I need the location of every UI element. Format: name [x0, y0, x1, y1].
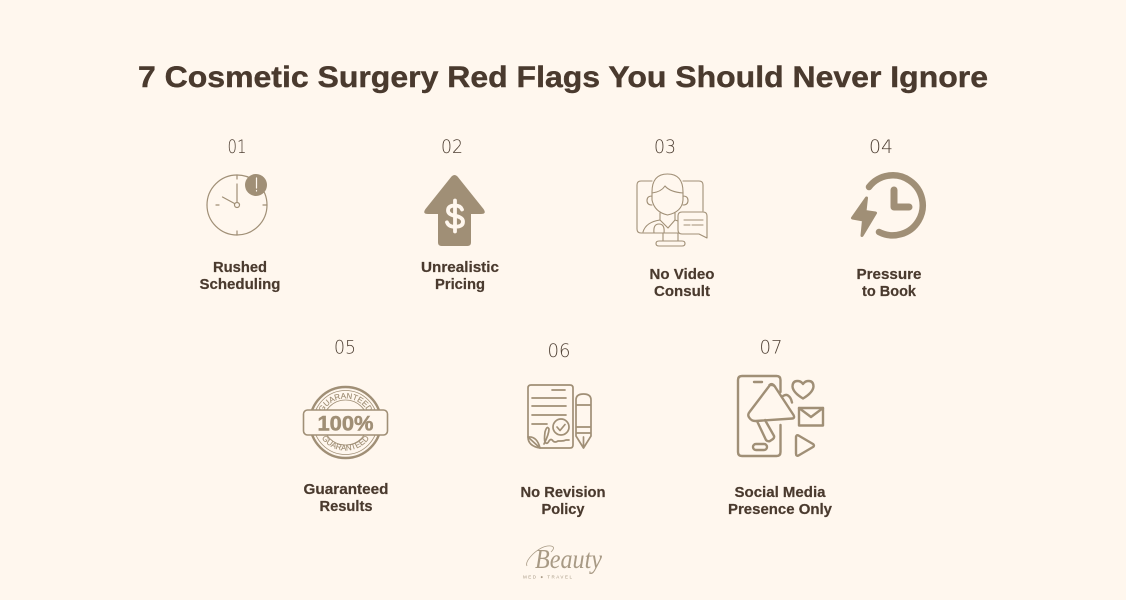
item 05: guaranteed results: 05	[334, 338, 356, 358]
icon: guaranteed stamp: GUARANTEED	[319, 392, 372, 410]
item 04: pressure to book	[852, 137, 923, 300]
item 05: guaranteed results: Results	[320, 499, 372, 515]
item 05: guaranteed results	[302, 338, 388, 515]
item 01: rushed scheduling: Rushed	[213, 260, 267, 276]
logo: Beauty Med Travel	[523, 544, 602, 580]
icon: guaranteed stamp	[302, 386, 388, 460]
logo: Beauty Med Travel: Beauty	[535, 544, 602, 574]
icon: signed document and pencil	[528, 385, 591, 448]
item 03: no video consult: 03	[654, 137, 676, 158]
icon: doctor on monitor	[637, 174, 707, 246]
item 04: pressure to book: Pressure	[856, 267, 922, 283]
icon: guaranteed stamp: GUARANTEED	[322, 436, 368, 451]
item 01: rushed scheduling: 01	[228, 137, 246, 158]
item 02: unrealistic pricing: Unrealistic	[421, 260, 499, 276]
icon: clock with lightning	[852, 175, 923, 236]
icon: phone with megaphone	[738, 376, 823, 456]
item 01: rushed scheduling	[200, 137, 280, 293]
icon: up arrow with dollar	[424, 175, 485, 246]
item 07: social media presence only: Presence Only	[728, 502, 832, 518]
title: 7 Cosmetic Surgery Red Flags You Should Never Ignore	[138, 61, 988, 94]
item 05: guaranteed results: Guaranteed	[304, 482, 388, 498]
item 03: no video consult: Consult	[654, 284, 710, 300]
item 06: no revision policy: 06	[548, 341, 570, 362]
item 06: no revision policy: Policy	[542, 502, 584, 518]
item 04: pressure to book: 04	[869, 137, 893, 158]
item 04: pressure to book: to Book	[862, 284, 917, 300]
item 02: unrealistic pricing: Pricing	[435, 277, 485, 293]
item 07: social media presence only	[728, 338, 832, 518]
item 06: no revision policy	[520, 341, 606, 518]
item 01: rushed scheduling: Scheduling	[200, 277, 280, 293]
item 02: unrealistic pricing	[421, 137, 499, 293]
item 03: no video consult	[637, 137, 715, 300]
item 02: unrealistic pricing: 02	[441, 137, 463, 158]
item 07: social media presence only: Social Media	[734, 485, 826, 501]
icon: clock with alert	[207, 174, 267, 235]
item 03: no video consult: No Video	[650, 267, 715, 283]
item 06: no revision policy: No Revision	[520, 485, 606, 501]
logo: Beauty Med Travel: MED ● TRAVEL	[523, 574, 572, 580]
item 07: social media presence only: 07	[760, 338, 782, 358]
icon: guaranteed stamp: 100%	[318, 412, 374, 436]
